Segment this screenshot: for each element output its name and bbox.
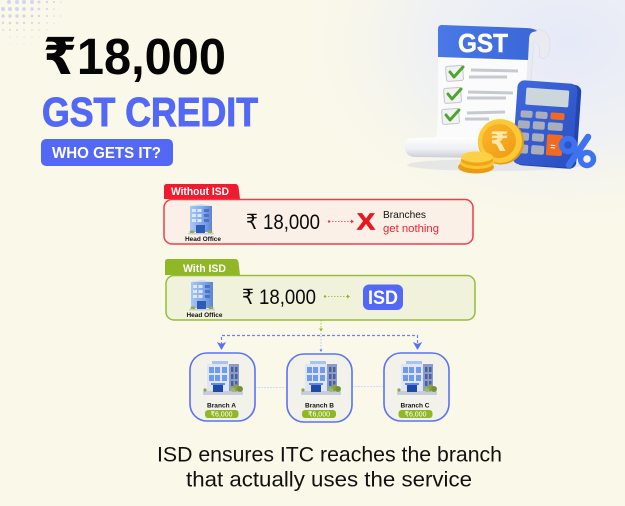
icon: blue GST header: GST — [458, 28, 508, 58]
icon: calculator: = — [550, 141, 556, 152]
tab: without ISD: Without ISD — [171, 186, 229, 198]
caption — [157, 444, 502, 492]
icon: rupee coin — [478, 119, 524, 164]
arrow — [328, 220, 354, 224]
dot pattern — [1, 0, 62, 44]
card: branch A — [190, 353, 255, 421]
icon: bottom paper roll — [405, 137, 492, 158]
label: head office: Head Office — [186, 312, 223, 319]
icon: building — [203, 361, 243, 395]
amount: ₹ 18,000 — [246, 211, 320, 234]
pill: amount: ₹6,000 — [404, 410, 427, 418]
icon: paper roll top — [522, 30, 550, 129]
pill: amount: ₹6,000 — [210, 410, 233, 418]
connectors between branches — [255, 386, 384, 388]
icon: rupee coin: ₹ — [490, 127, 509, 157]
badge: ISD: ISD — [368, 288, 398, 309]
card: branch B — [287, 354, 352, 422]
panel: with ISD — [165, 259, 475, 320]
arrow — [324, 294, 350, 298]
icon: head office building — [189, 280, 215, 310]
icon: blue GST header — [438, 25, 537, 60]
tab: with ISD — [165, 259, 240, 275]
title: amount: ₹18,000 — [43, 28, 226, 85]
badge: ISD — [363, 284, 403, 310]
text: branches get nothing: Branches — [383, 209, 426, 221]
pill: who gets it: WHO GETS IT? — [52, 145, 161, 162]
tab: without ISD — [164, 184, 240, 199]
text: branches get nothing: get nothing — [383, 223, 439, 235]
pill: who gets it — [41, 139, 173, 166]
illustration: GST document, calculator and coins — [405, 25, 594, 174]
panel: without ISD — [164, 184, 473, 244]
heading: GST credit: GST CREDIT — [42, 89, 258, 135]
icon: paper sheet — [430, 56, 528, 146]
icon: building — [301, 361, 341, 395]
icon: percent — [562, 137, 594, 166]
icon: coin stack — [458, 152, 494, 174]
label: branch B: Branch B — [305, 402, 334, 410]
label: branch A: Branch A — [207, 402, 236, 410]
icon: checklist — [442, 65, 518, 125]
tab: with ISD: With ISD — [183, 263, 226, 275]
label: head office: Head Office — [185, 236, 221, 243]
icon: building — [397, 361, 437, 395]
pill: amount: ₹6,000 — [308, 410, 330, 418]
text: branches get nothing — [383, 209, 439, 235]
icon: head office building — [188, 204, 214, 234]
amount: ₹ 18,000 — [242, 286, 316, 309]
arrow: down from ISD panel — [319, 320, 323, 332]
icon: calculator — [512, 80, 582, 169]
icon: red X: X — [357, 208, 376, 234]
caption: that actually uses the service — [186, 468, 472, 492]
arrows: distribution to branches — [218, 333, 421, 352]
card: branch C — [384, 353, 449, 421]
caption: ISD ensures ITC reaches the branch — [157, 444, 502, 466]
label: branch C: Branch C — [400, 402, 430, 410]
